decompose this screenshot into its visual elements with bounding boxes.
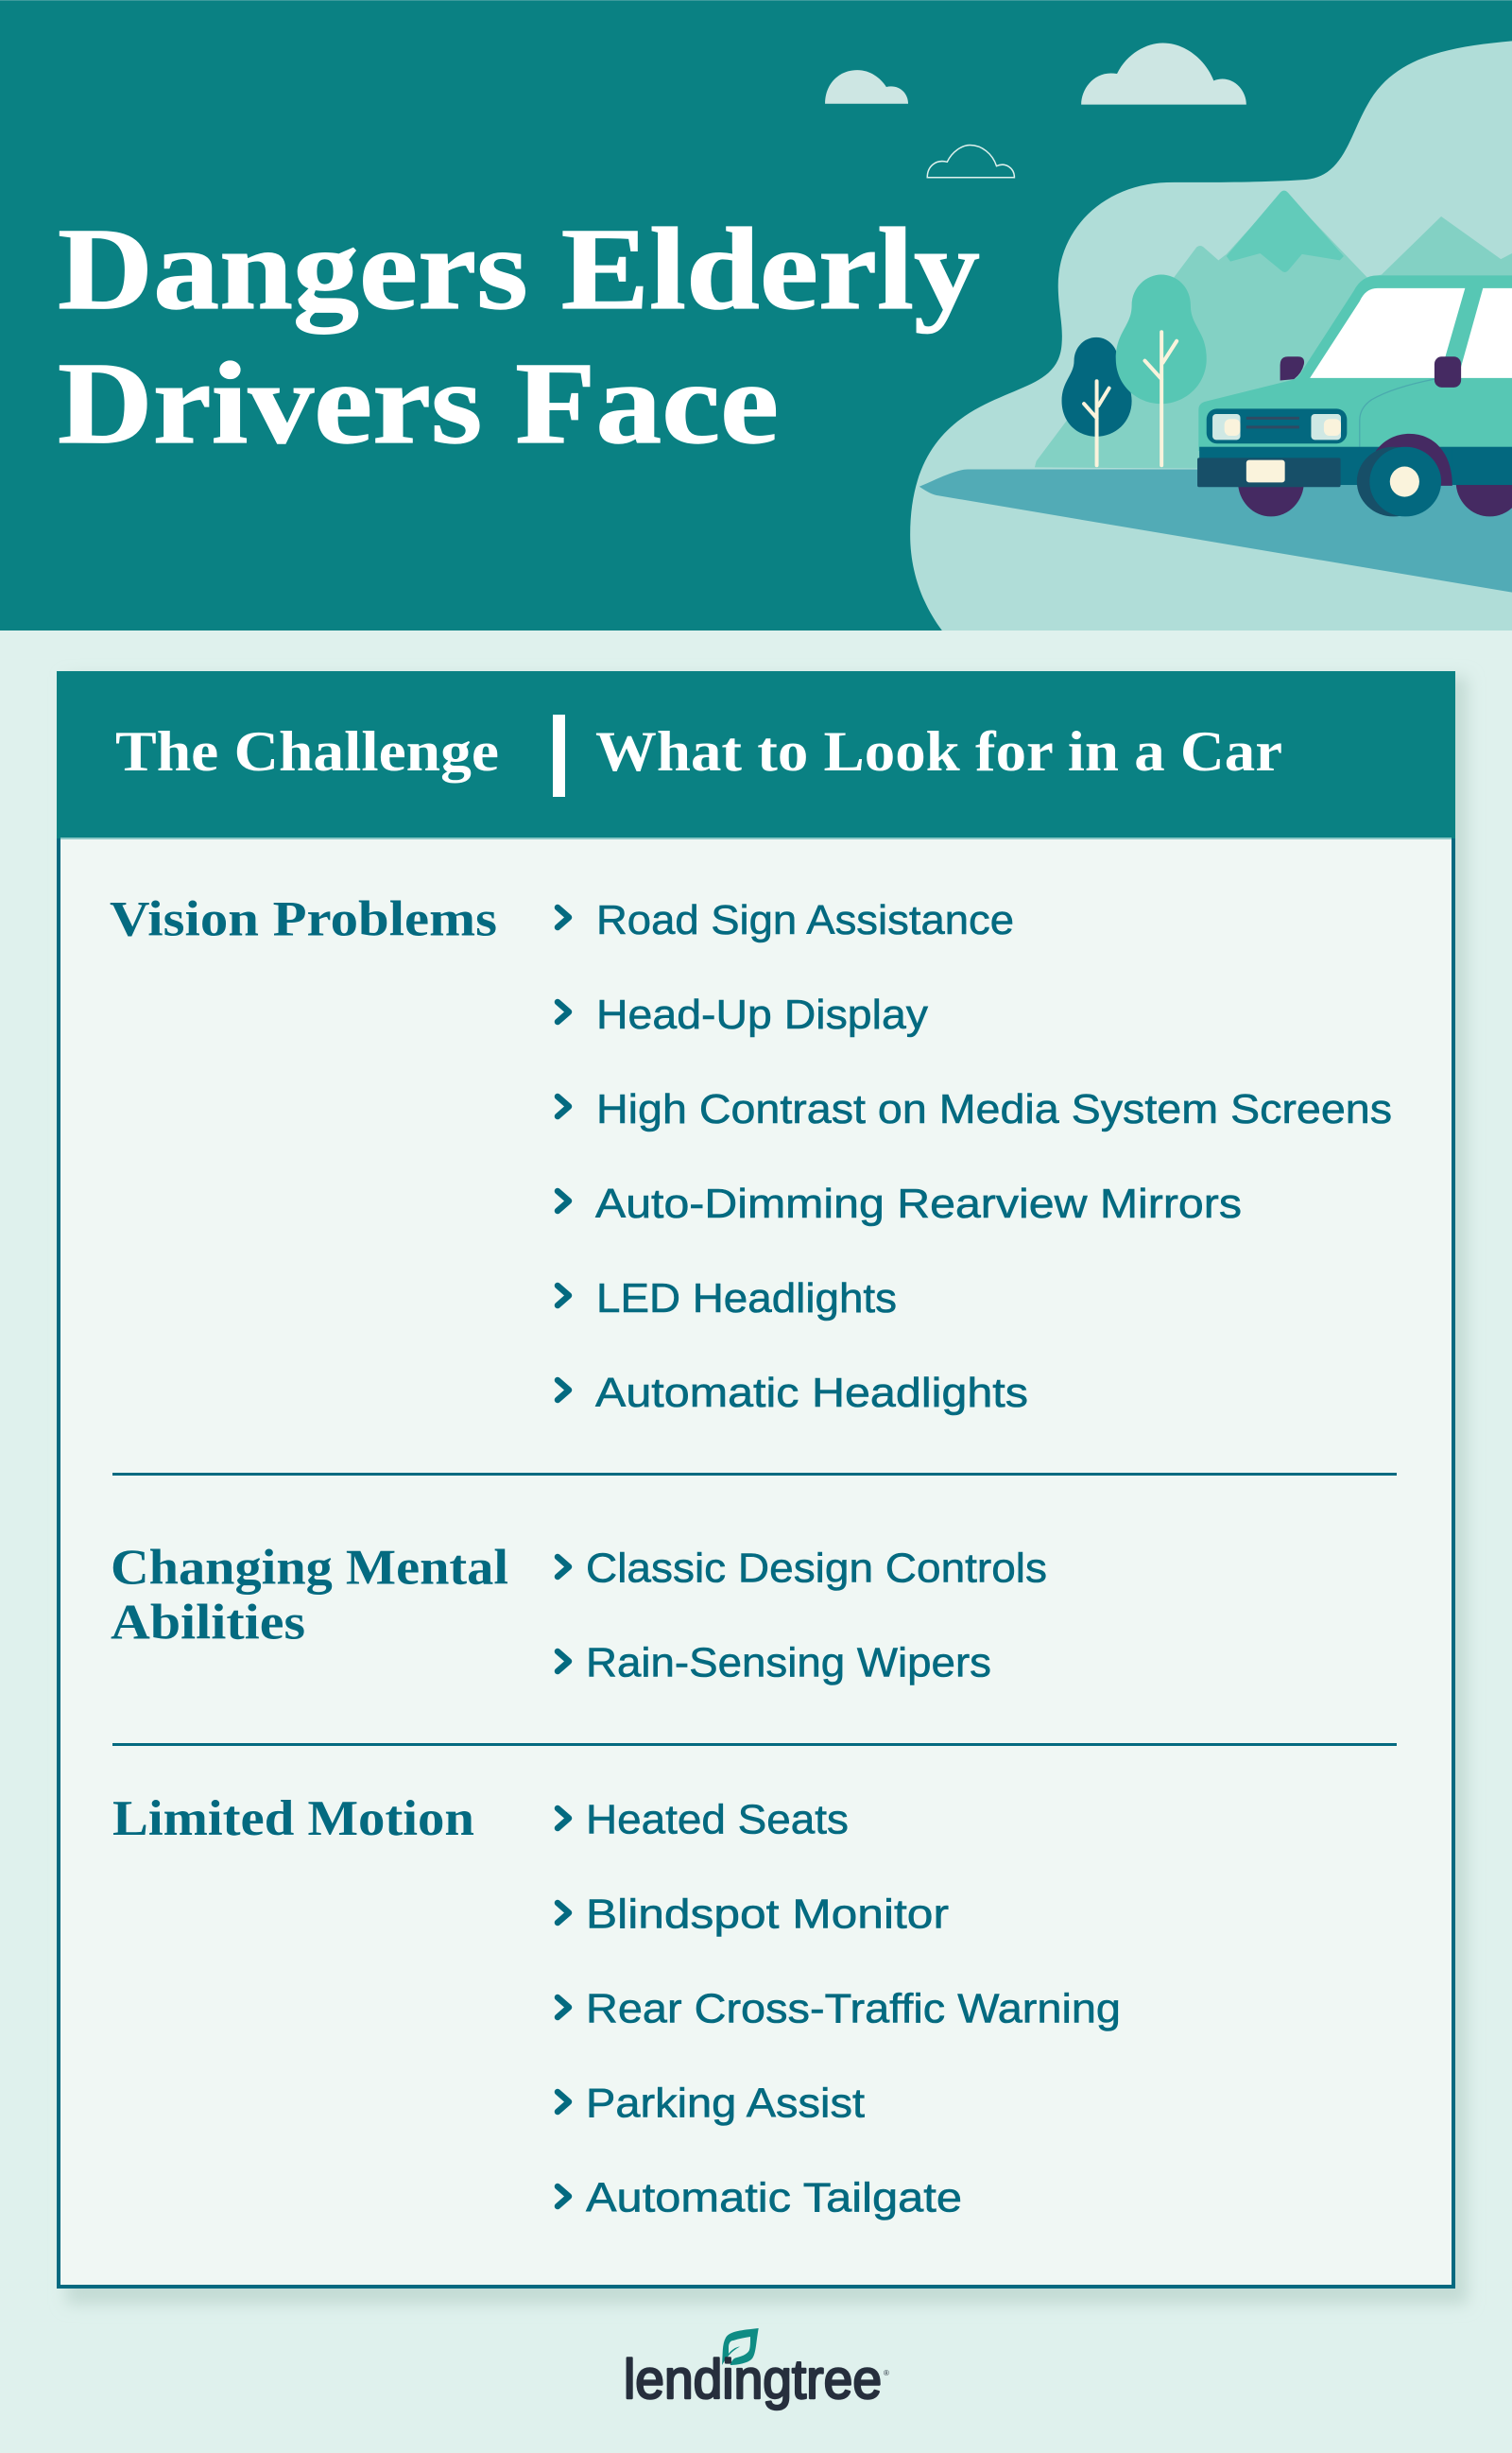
- list: vision features: High Contrast on Media System Screens: [596, 1086, 1392, 1132]
- outline cloud: [927, 146, 1014, 178]
- list: motion features: Rear Cross-Traffic Warning: [586, 1985, 1121, 2032]
- list: motion features: Heated Seats: [586, 1796, 849, 1843]
- column heading: challenge: The Challenge: [115, 720, 499, 783]
- list: mental features: [558, 1545, 1047, 1686]
- illustration: car in landscape: [825, 41, 1512, 631]
- mountain peak: [1227, 191, 1344, 272]
- list: vision features: [558, 897, 1392, 1416]
- column heading: what to look for: What to Look for in a Car: [595, 720, 1282, 783]
- section: changing mental abilities: [111, 1541, 1047, 1686]
- title: Dangers Elderly: [58, 204, 980, 335]
- small cloud: [825, 70, 908, 104]
- list: motion features: [558, 1796, 1121, 2221]
- list: motion features: Automatic Tailgate: [586, 2174, 962, 2221]
- section: vision problems: Vision Problems: [110, 892, 497, 947]
- table header: [57, 671, 1455, 839]
- list: vision features: Auto-Dimming Rearview Mirrors: [595, 1181, 1242, 1227]
- panel: table: [57, 671, 1455, 2287]
- title: Drivers Face: [58, 338, 779, 468]
- mountains: [1035, 191, 1512, 471]
- icon: leaf: [722, 2328, 759, 2365]
- list: motion features: Parking Assist: [586, 2080, 865, 2127]
- section: changing mental abilities: Abilities: [111, 1596, 305, 1650]
- section: changing mental abilities: Changing Mental: [111, 1541, 508, 1596]
- list: vision features: Automatic Headlights: [595, 1370, 1028, 1416]
- landscape blob: [910, 41, 1512, 631]
- logo: lendingtree: ®: [884, 2369, 889, 2377]
- dark tree: [1062, 337, 1132, 465]
- list: vision features: LED Headlights: [596, 1275, 897, 1322]
- list: motion features: Blindspot Monitor: [586, 1891, 949, 1938]
- list: mental features: Rain-Sensing Wipers: [586, 1639, 991, 1686]
- section: limited motion: [112, 1791, 1121, 2221]
- big cloud: [1081, 43, 1246, 105]
- header divider: [553, 715, 565, 797]
- title: [58, 204, 980, 468]
- list: mental features: Classic Design Controls: [586, 1545, 1047, 1592]
- section: limited motion: Limited Motion: [112, 1791, 474, 1846]
- car: [1197, 275, 1512, 516]
- header banner: [0, 0, 1512, 631]
- light tree: [1116, 275, 1207, 465]
- list: vision features: Head-Up Display: [596, 992, 928, 1038]
- section: vision problems: [110, 892, 1392, 1416]
- list: vision features: Road Sign Assistance: [596, 897, 1014, 943]
- logo: lendingtree: lendingtree: [624, 2349, 882, 2410]
- road: [919, 470, 1512, 593]
